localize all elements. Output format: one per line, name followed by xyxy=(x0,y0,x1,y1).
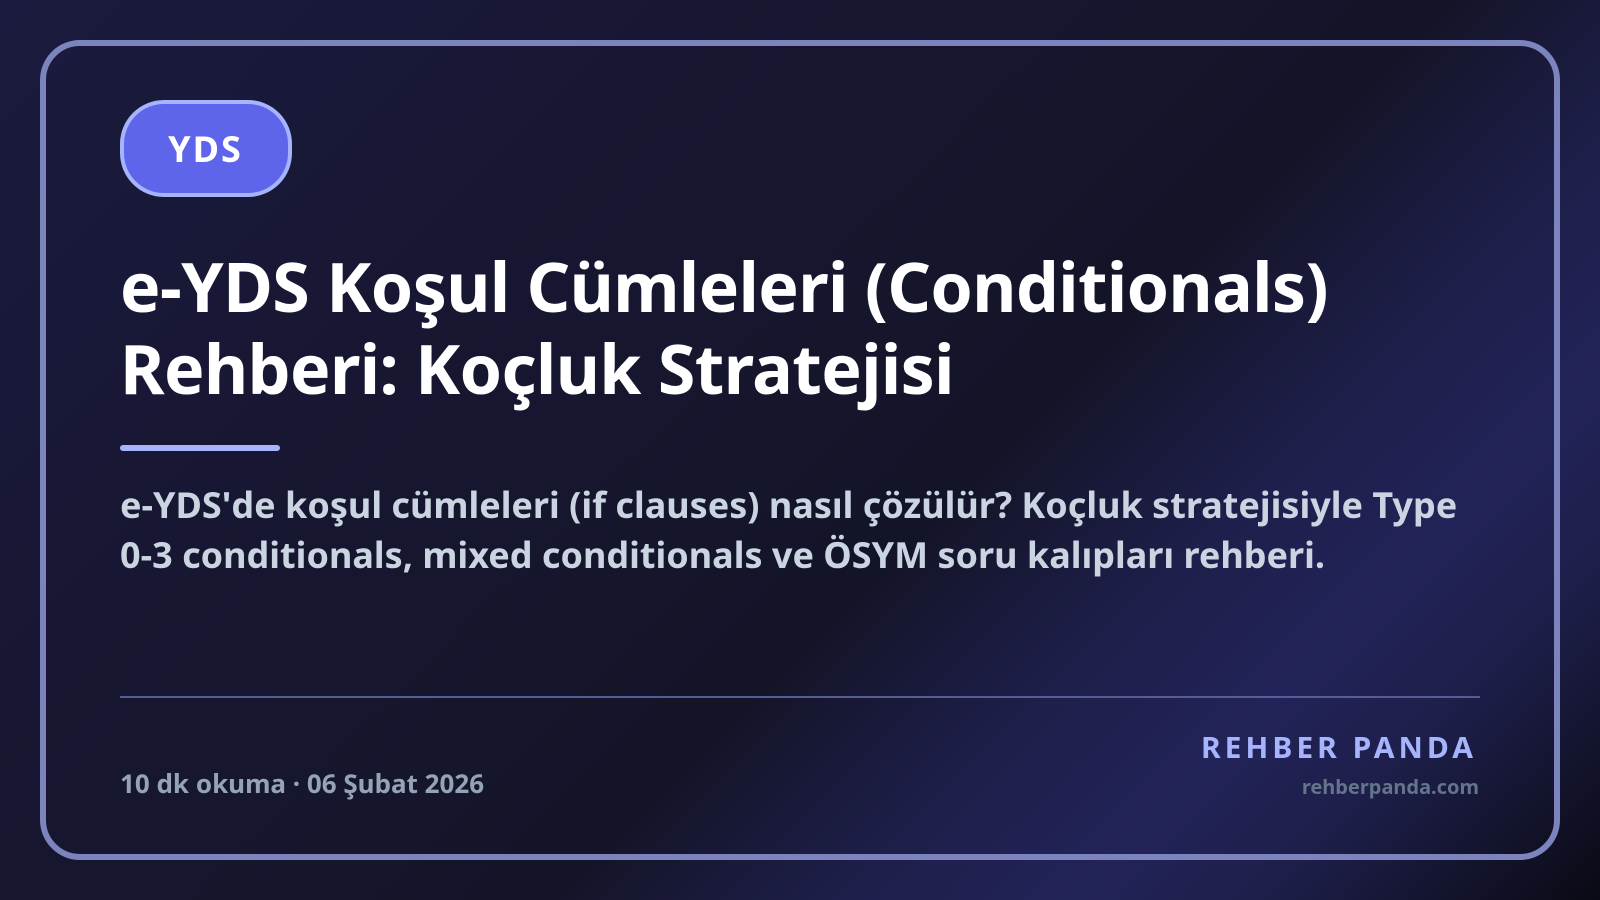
description: 0-3 conditionals, mixed conditionals ve ÖSYM soru kalıpları rehberi. xyxy=(120,530,1325,579)
title: Rehberi: Koçluk Stratejisi xyxy=(120,321,954,414)
reading time and date: 10 dk okuma · 06 Şubat 2026 xyxy=(120,765,484,801)
title xyxy=(120,239,1328,414)
description xyxy=(120,480,1457,579)
accent rule xyxy=(120,445,280,451)
description: e-YDS'de koşul cümleleri (if clauses) nasıl çözülür? Koçluk stratejisiyle Type xyxy=(120,480,1457,529)
category badge xyxy=(120,100,292,197)
title: e-YDS Koşul Cümleleri (Conditionals) xyxy=(120,239,1328,332)
category badge: YDS xyxy=(168,124,243,173)
brand name: REHBER PANDA xyxy=(1201,726,1477,767)
website: rehberpanda.com xyxy=(1302,773,1479,800)
